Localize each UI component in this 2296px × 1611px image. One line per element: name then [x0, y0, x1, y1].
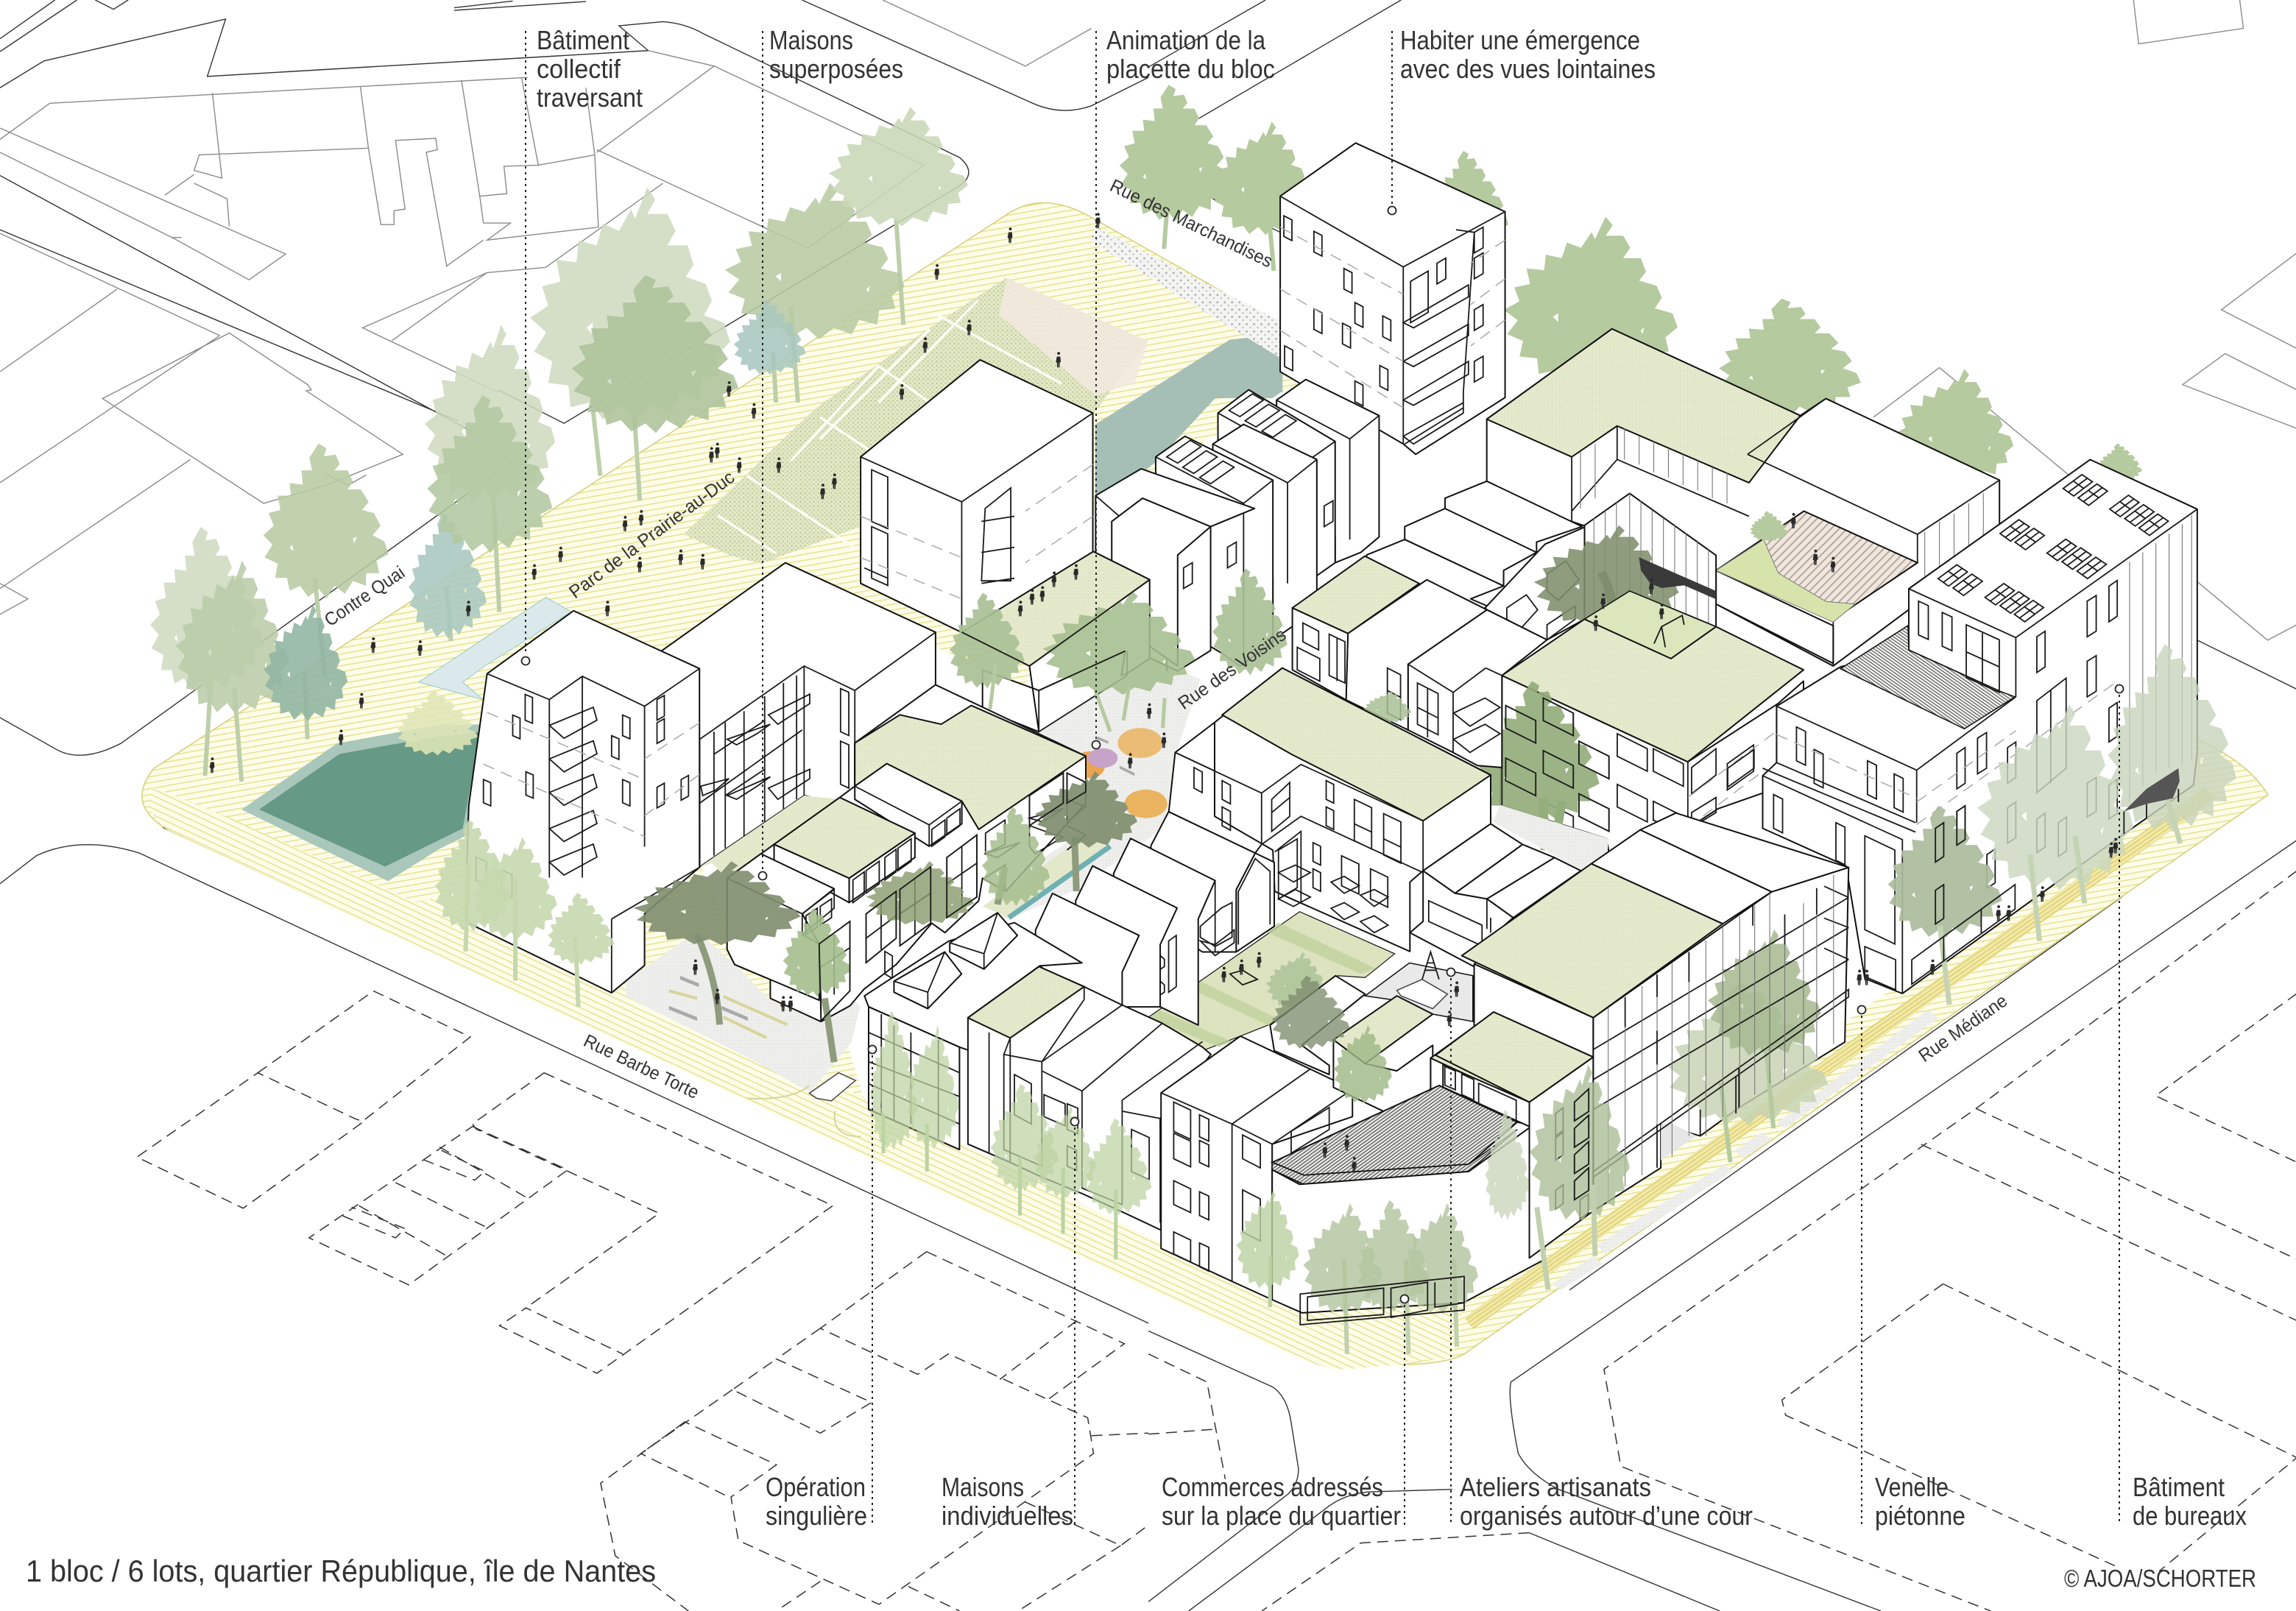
- court: green shared garden: [1148, 912, 1395, 1051]
- stairs and steps block: [1367, 481, 1582, 645]
- label: Bâtiment de bureaux: de bureaux: [2133, 1501, 2247, 1531]
- gabled house 2: [1075, 866, 1177, 1007]
- buildings: L corner block and workshop court: [1161, 976, 1544, 1313]
- wing trees: [1486, 1110, 1530, 1220]
- paving: placette: [986, 659, 1201, 919]
- trees: umbrella and mid trees on venelle: [633, 771, 1137, 1062]
- plaza yellow strips: [669, 991, 787, 1038]
- callout leader: Commerces: [1400, 1295, 1409, 1525]
- paved court under tree: [1493, 805, 1609, 871]
- trees: pale trees on Barbe Torte facades: [869, 1010, 1270, 1307]
- court: darker planting strips: [1148, 923, 1376, 1047]
- callout leader: Bâtiment collectif traversant: [521, 31, 530, 665]
- context: dashed neighbouring plots, bottom left: [0, 827, 1148, 1611]
- dormer two: [950, 913, 1017, 969]
- label: Commerces adressés: sur la place du quartier: [1162, 1501, 1401, 1531]
- label: Maisons superposées: superposées: [769, 54, 903, 84]
- roof with dormers: [864, 923, 1082, 1051]
- label: Bâtiment collectif traversant: [537, 25, 643, 113]
- street label: Rue des Marchandises: Rue des Marchandises: [1106, 175, 1276, 272]
- building: tower Bâtiment collectif traversant: [465, 611, 699, 993]
- tree: dark olive on glass: [866, 861, 974, 925]
- callout leader: Habiter une émergence: [1388, 31, 1396, 215]
- disc: orange mat three: [1074, 751, 1106, 779]
- label: Maisons individuelles: Maisons: [942, 1472, 1024, 1502]
- label: Venelle piétonne: piétonne: [1875, 1501, 1965, 1531]
- paving: placette and Barbe Torte plaza: [626, 659, 1201, 1092]
- court table: [1230, 970, 1257, 985]
- trees: in front of tower: [435, 820, 615, 1007]
- building P: long green roof with tree in front: [1169, 568, 1580, 966]
- small row M1, green roof: [1293, 608, 1348, 700]
- building: park tower: [861, 360, 1093, 632]
- mid tree on glazing: [1708, 930, 1821, 1057]
- callout leader: Bâtiment de bureaux: [2116, 684, 2123, 1525]
- label: Venelle piétonne: [1875, 1472, 1965, 1531]
- building: collective block behind tower: [661, 563, 936, 878]
- ground: park and public-space plot: [142, 203, 2268, 1370]
- small row M2: [1346, 580, 1487, 730]
- street label: Rue Médiane: Rue Médiane: [1915, 991, 2011, 1066]
- street label: Rue Barbe Torte: Rue Barbe Torte: [580, 1030, 702, 1103]
- building: upper offices and terrace: [1487, 329, 1999, 666]
- terrace tree: [1750, 511, 1788, 542]
- caption: credit: © AJOA/SCHORTER: [2064, 1565, 2256, 1592]
- callout leader: Maisons individuelles: [1070, 1117, 1079, 1525]
- tree: pale on Rue Médiane: [1977, 704, 2133, 891]
- label: Ateliers artisanats: [1460, 1472, 1753, 1531]
- tree below canopy, right: [1042, 591, 1195, 695]
- row of townhouses with solar panels: [1095, 380, 1379, 671]
- label: Bâtiment de bureaux: Bâtiment: [2133, 1472, 2225, 1502]
- frames: glass block: [819, 773, 1086, 1021]
- label: Opération singulière: singulière: [766, 1501, 867, 1531]
- pavilion on roof: [855, 764, 962, 846]
- context: surrounding city plan, top left: [0, 0, 1148, 755]
- label: Commerces adressés: Commerces adressés: [1162, 1472, 1383, 1502]
- car in yard: [1397, 980, 1447, 1009]
- label: Maisons superposées: [769, 25, 903, 84]
- canopy green underside: [962, 551, 1150, 666]
- street label: Rue des Voisins: Rue des Voisins: [1174, 624, 1290, 714]
- swing frame: [1654, 615, 1684, 648]
- street: Rue des Marchandises pavement: [1091, 227, 1288, 358]
- roof: green stippled: [1462, 864, 1723, 1018]
- terrace: wood deck: [1716, 511, 1918, 620]
- hatched terrace: [1840, 626, 2015, 729]
- disc: purple mat: [1088, 748, 1117, 768]
- gabled house 4: [1151, 812, 1255, 952]
- label: Maisons individuelles: individuelles: [942, 1501, 1073, 1531]
- context: dashed neighbouring plots, bottom right: [1148, 840, 2296, 1611]
- lawn: white dividers: [718, 300, 1062, 553]
- houses along Barbe Torte: [968, 966, 1211, 1230]
- gabled house 1: [1036, 893, 1139, 1007]
- water: pale basin: [419, 598, 571, 700]
- caption: title: 1 bloc / 6 lots, quartier République, île de Nantes: [26, 1554, 656, 1588]
- umbrella crown: [633, 861, 800, 945]
- label: Opération singulière: Opération: [766, 1472, 866, 1502]
- trees: park row: [150, 107, 968, 782]
- ground: lower stripe band towards corner: [366, 885, 1464, 1367]
- trees: back row behind buildings: [1120, 85, 2142, 485]
- green-roof box: [774, 844, 849, 902]
- street label: Contre Quai: Contre Quai: [321, 562, 409, 631]
- label: Maisons individuelles: [942, 1472, 1073, 1531]
- pink wall behind lawn: [998, 278, 1148, 395]
- terrace under part: [1716, 570, 1833, 663]
- label: Habiter une émergence: Habiter une émergence: [1400, 25, 1640, 55]
- black suspended sculpture: [1639, 557, 1716, 599]
- trees and shop fronts, courtyard building: [1300, 1200, 1478, 1354]
- building M: green roof with patio hole: [1500, 676, 1804, 854]
- patio tree: [1534, 525, 1679, 627]
- label: Habiter une émergence: avec des vues lointaines: [1400, 54, 1656, 84]
- callout leader: Animation de la placette: [1092, 31, 1100, 749]
- disc: orange mat: [1117, 728, 1163, 758]
- callout leader: Ateliers artisanats: [1447, 969, 1455, 1525]
- label: Ateliers artisanats: organisés autour d’une cour: [1460, 1501, 1753, 1531]
- terrace: green band: [1716, 539, 1855, 622]
- gabled house 3: [1114, 838, 1215, 1025]
- solar panels: [1938, 475, 2169, 622]
- label: Venelle piétonne: Venelle: [1875, 1472, 1949, 1502]
- patio green floor: [1585, 591, 1716, 659]
- small row M3 with balconies: [1408, 610, 1547, 768]
- workshop courtyard hatched deck: [1272, 1086, 1517, 1175]
- label: Bâtiment collectif traversant: traversant: [537, 82, 643, 113]
- trees in court: [1272, 976, 1350, 1049]
- tree: pale large on corner: [2108, 645, 2236, 832]
- court tree: [1266, 952, 1329, 1009]
- label: Maisons superposées: Maisons: [769, 25, 853, 55]
- water: blue-green pool behind building: [1095, 333, 1282, 512]
- patio glass facade: [1585, 493, 1716, 627]
- white box with tree shadow: [727, 854, 834, 1000]
- block core: white base below the buildings: [699, 366, 2197, 1303]
- green roof blocks and glass frames, venelle: [727, 685, 1086, 1022]
- street: Rue Médiane yellow strip: [1464, 787, 2216, 1329]
- central cluster: stepped block and patio: [1293, 493, 1804, 871]
- central cluster: gabled houses and court: [864, 812, 1473, 1230]
- label: Bâtiment collectif traversant: Bâtiment: [537, 25, 629, 55]
- benches on placette: [669, 735, 1134, 1021]
- wing: workshop with green roof: [1530, 1057, 1593, 1258]
- callout leader: Opération singulière: [869, 1045, 876, 1525]
- left wing of P: [1169, 723, 1262, 854]
- roof: large green roof: [1487, 329, 1801, 483]
- dark façade feature: [2124, 768, 2180, 812]
- label: Animation de la placette du bloc: placette du bloc: [1106, 54, 1275, 84]
- dormer one: [894, 952, 961, 1009]
- label: Ateliers artisanats: Ateliers artisanats: [1460, 1472, 1651, 1502]
- water channel: Venelle blue line: [1009, 846, 1110, 918]
- tree: mid green: [783, 908, 851, 996]
- roof: large stippled green roof: [855, 706, 1086, 829]
- callout leader: Maisons superposées: [758, 31, 767, 880]
- callout leader: Venelle piétonne: [1858, 1005, 1865, 1525]
- street label: Parc de la Prairie-au-Duc: Parc de la Prairie-au-Duc: [565, 467, 738, 603]
- small green roof court buildings: [1333, 996, 1433, 1063]
- disc: orange mat two: [1125, 790, 1168, 818]
- courtyard building facade: [1272, 1116, 1544, 1313]
- floor slabs: [1593, 886, 1848, 1178]
- context: surrounding city plan, top right: [1148, 0, 2296, 690]
- park tower canopy and plinth: [950, 551, 1195, 732]
- label: Commerces adressés: [1162, 1472, 1401, 1531]
- pale tree on glazing: [1668, 982, 1829, 1125]
- building: Habiter une émergence tower: [1280, 143, 1505, 454]
- car on Rue Barbe Torte: [747, 1073, 861, 1136]
- label: Bâtiment de bureaux: [2133, 1472, 2247, 1531]
- building: large glazed block with green roof: [1435, 813, 1848, 1290]
- label: Opération singulière: [766, 1472, 867, 1531]
- water: large green pond: [241, 725, 486, 881]
- building: office with solar roof: [1728, 459, 2236, 1005]
- label: Animation de la placette du bloc: [1106, 25, 1275, 84]
- tree: dark umbrella on placette: [1035, 771, 1137, 848]
- building H glass: [869, 1007, 959, 1150]
- grey yard: [1365, 963, 1473, 1022]
- tree on M facade: [1478, 681, 1600, 825]
- venelle green strip: [983, 833, 1106, 918]
- tree: mid green on venelle: [982, 807, 1050, 906]
- label: Animation de la placette du bloc: Animation de la: [1106, 25, 1266, 55]
- lawn: park allotments: [684, 278, 1148, 564]
- ground lawn strip: [700, 796, 841, 878]
- street: Rue Médiane stippled sidewalk patches: [1552, 1010, 1939, 1290]
- ground: Barbe Torte pavement stripes: [149, 787, 1405, 1370]
- tree below canopy, left: [950, 593, 1025, 689]
- label: Bâtiment collectif traversant: collectif: [537, 54, 621, 84]
- people: silhouettes in the park and public spaces: [210, 213, 2118, 1172]
- ladder: [1422, 952, 1439, 980]
- tree: dark sage on Rue Médiane: [1888, 806, 2002, 938]
- water: pond inner: [259, 732, 480, 866]
- label: Habiter une émergence: [1400, 25, 1656, 84]
